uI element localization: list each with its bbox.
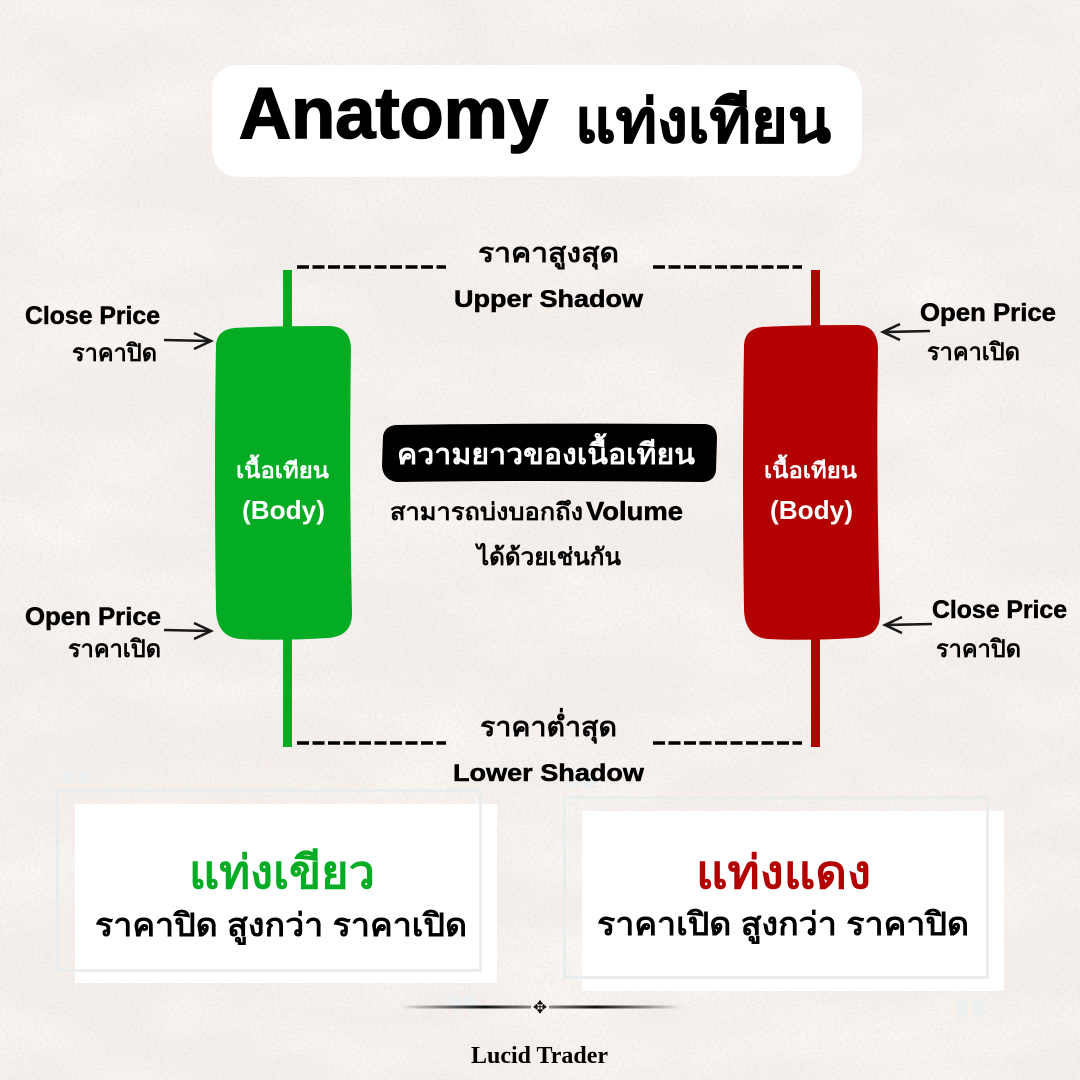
title: แท่งเทียน [575,88,831,155]
label: green open price: Open Price [25,603,161,631]
label: lower shadow: ราคาต่ำสุด [480,707,617,744]
label: upper shadow: Upper Shadow [454,286,643,313]
label: upper shadow: ราคาสูงสุด [478,238,619,270]
panel: green candle rule: ราคาปิด สูงกว่า ราคาเปิด [95,907,467,946]
callout description: ได้ด้วยเช่นกัน [474,542,622,571]
label: green open price [25,603,161,663]
arrow: green close [164,333,211,349]
footer: brand name: Lucid Trader [471,1043,608,1069]
callout: body length [382,424,717,482]
panel: red candle rule: แท่งแดง [696,846,871,898]
red candlestick: (Body) [770,495,853,525]
label: red open price: Open Price [920,299,1056,327]
dashed leader: high [297,265,802,269]
label: green close price: Close Price [25,302,160,330]
label: red close price [932,596,1067,663]
ornament divider [400,998,682,1018]
callout description: Volume [586,496,683,526]
label: green open price: ราคาเปิด [68,636,161,663]
panel: red candle rule [564,798,1004,991]
panel: green candle rule: แท่งเขียว [189,846,375,898]
title [212,65,862,177]
panel: red candle rule: ราคาเปิด สูงกว่า ราคาปิด [597,906,969,945]
green candlestick: เนื้อเทียน [236,454,329,483]
red candlestick [743,270,880,747]
label: upper shadow [454,238,643,313]
label: lower shadow: Lower Shadow [453,760,644,787]
label: green close price [25,302,160,367]
label: red open price: ราคาเปิด [927,339,1020,366]
red candlestick: เนื้อเทียน [764,454,857,483]
label: red close price: ราคาปิด [936,636,1021,663]
callout description [390,496,683,571]
label: lower shadow [453,707,644,787]
panel: green candle rule [58,790,497,983]
arrow: red close [885,617,932,633]
label: red open price [920,299,1056,366]
ornament divider: ✥ [533,998,547,1018]
green candlestick: (Body) [242,495,325,525]
label: red close price: Close Price [932,596,1067,624]
green candlestick [215,270,352,747]
arrow: red open [883,324,930,340]
label: green close price: ราคาปิด [72,340,157,367]
dashed leader: low [297,741,802,745]
callout: body length: ความยาวของเนื้อเทียน [397,432,695,471]
callout description: สามารถบ่งบอกถึง [390,499,583,526]
arrow: green open [164,623,211,639]
title: Anatomy [239,74,548,154]
